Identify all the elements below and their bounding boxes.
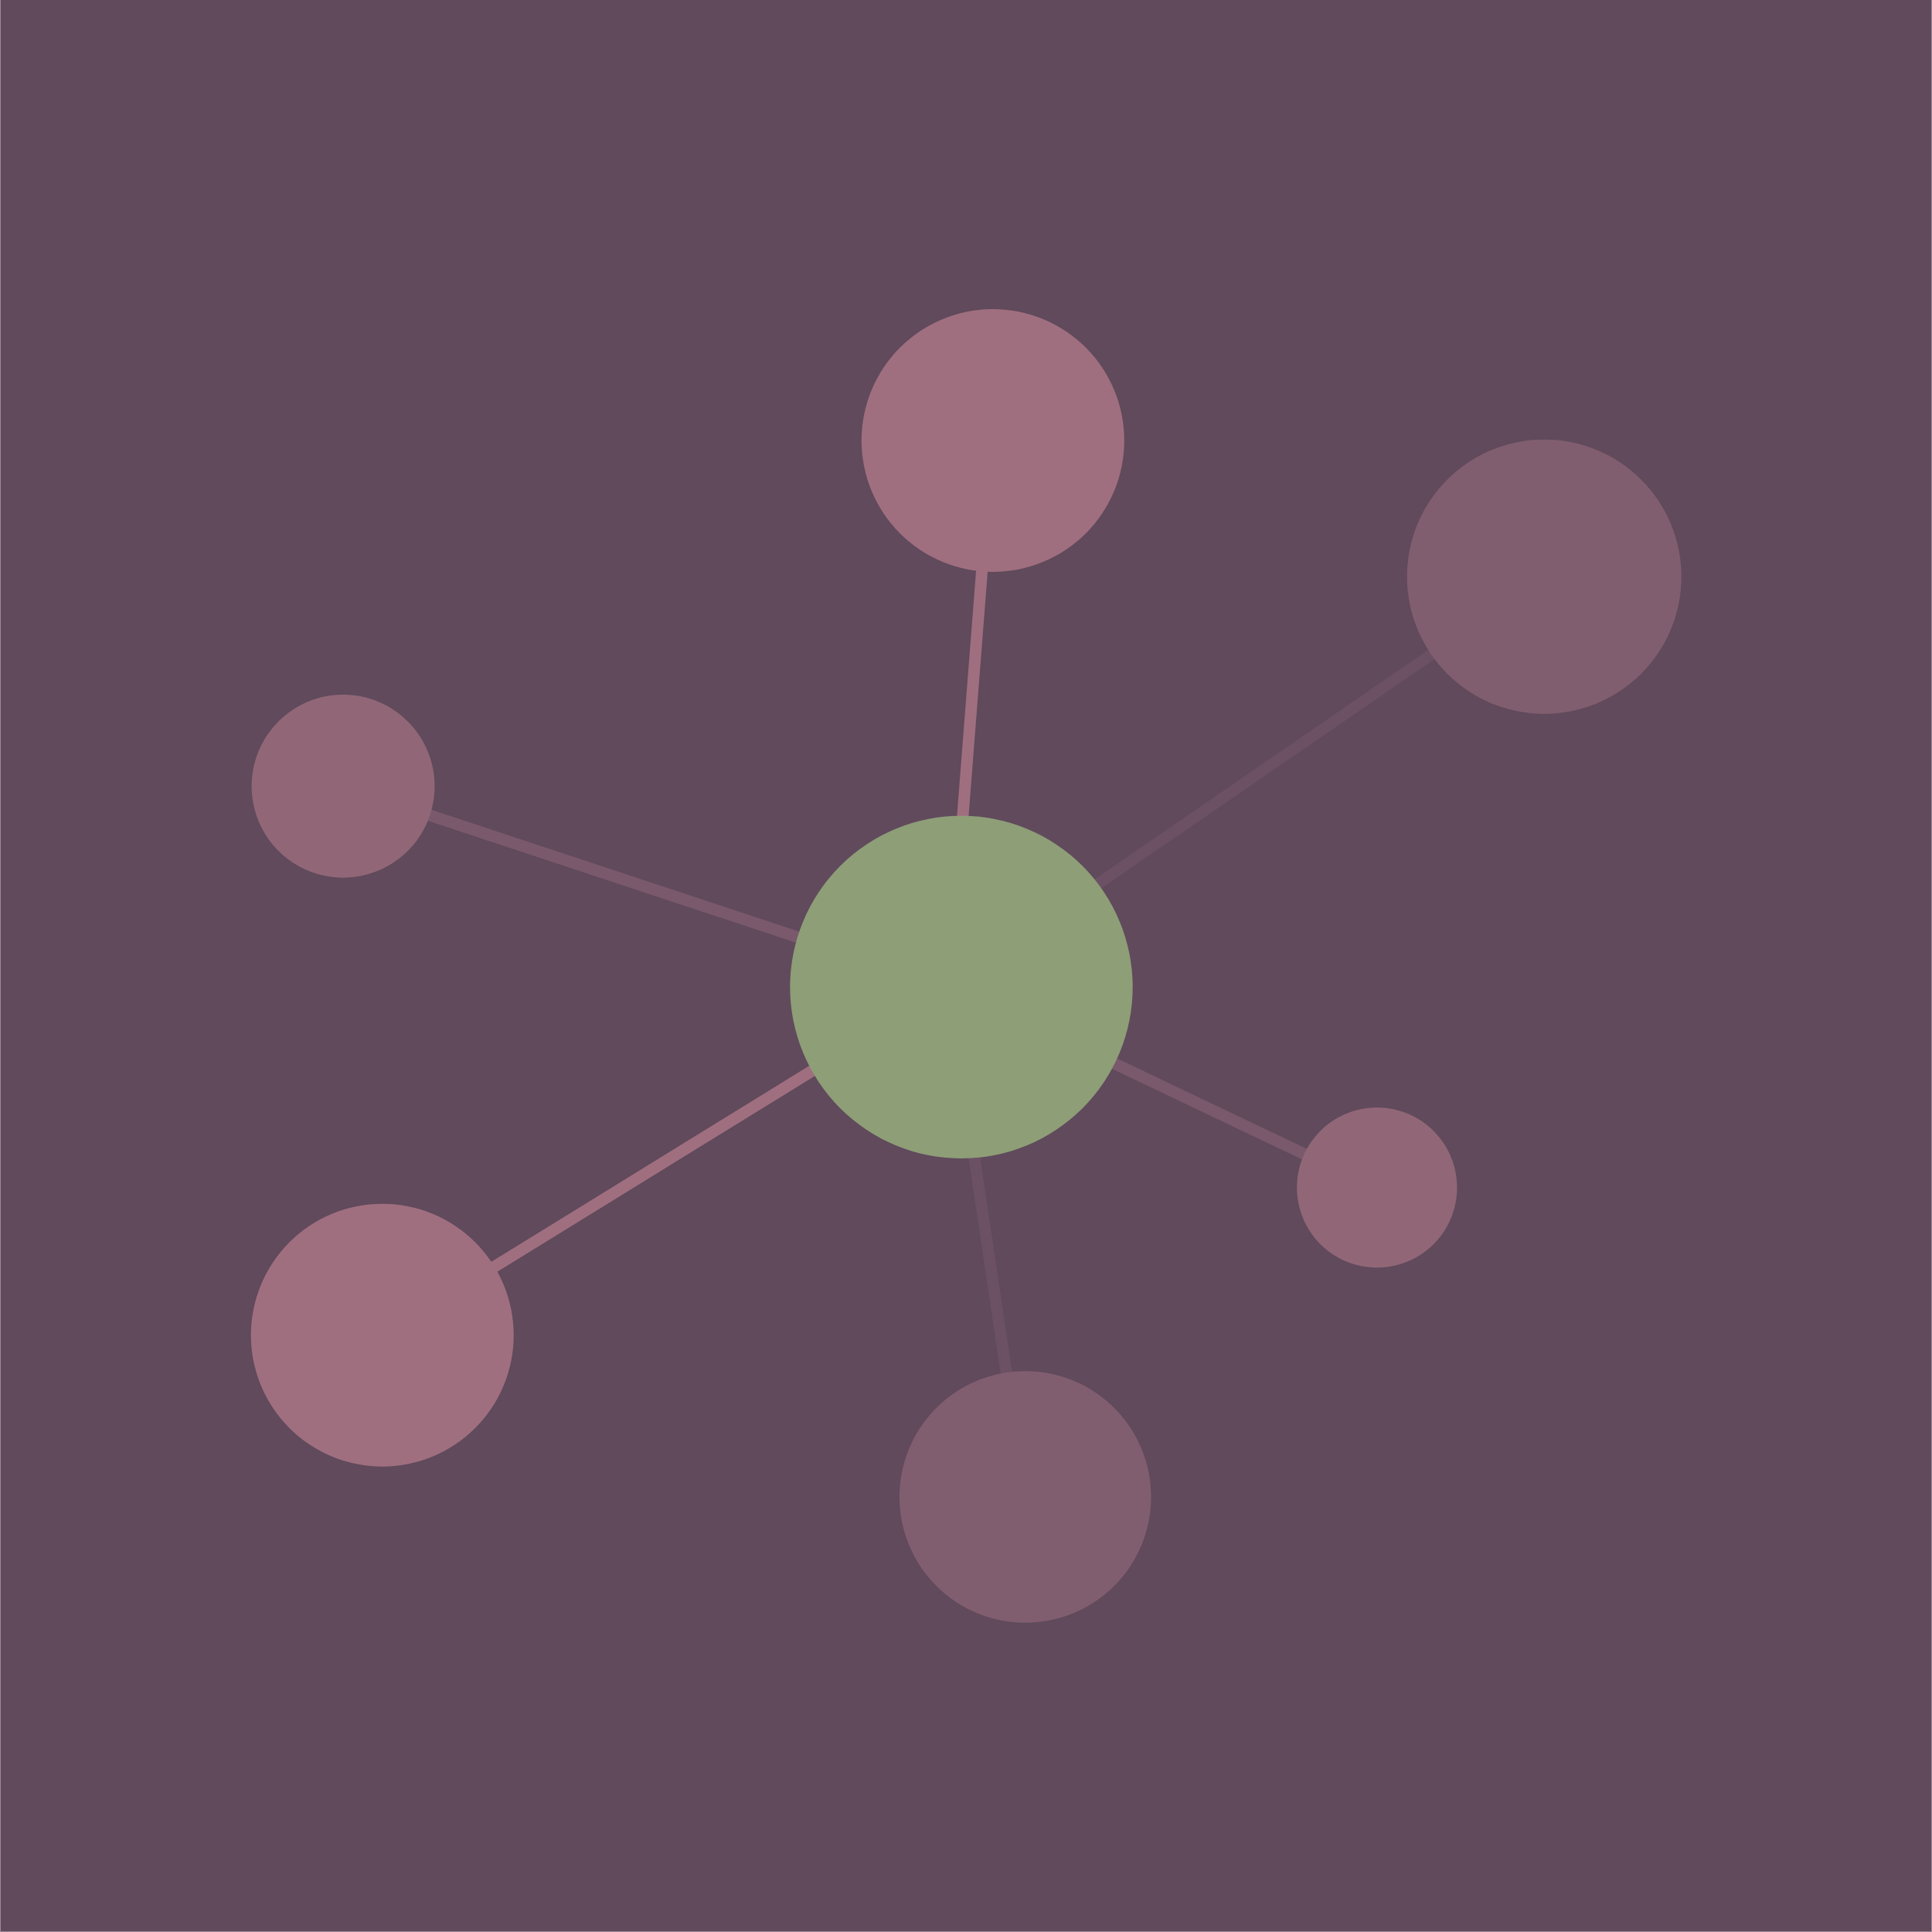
- node: upper right: [1407, 440, 1682, 714]
- node: lower left: [251, 1204, 514, 1467]
- node: bottom: [900, 1371, 1151, 1623]
- connector: hub to bottom node: [969, 1121, 1012, 1406]
- node: left: [252, 695, 434, 878]
- connector: hub to top node: [960, 541, 985, 850]
- connector: hub to upper right node: [1066, 640, 1453, 906]
- node: right: [1297, 1107, 1457, 1267]
- connector: hub to right node: [1097, 1056, 1329, 1166]
- node: central hub: [790, 816, 1133, 1158]
- node: top: [862, 309, 1124, 572]
- connector: hub to lower left node: [464, 1066, 819, 1286]
- connector: hub to left node: [402, 806, 819, 944]
